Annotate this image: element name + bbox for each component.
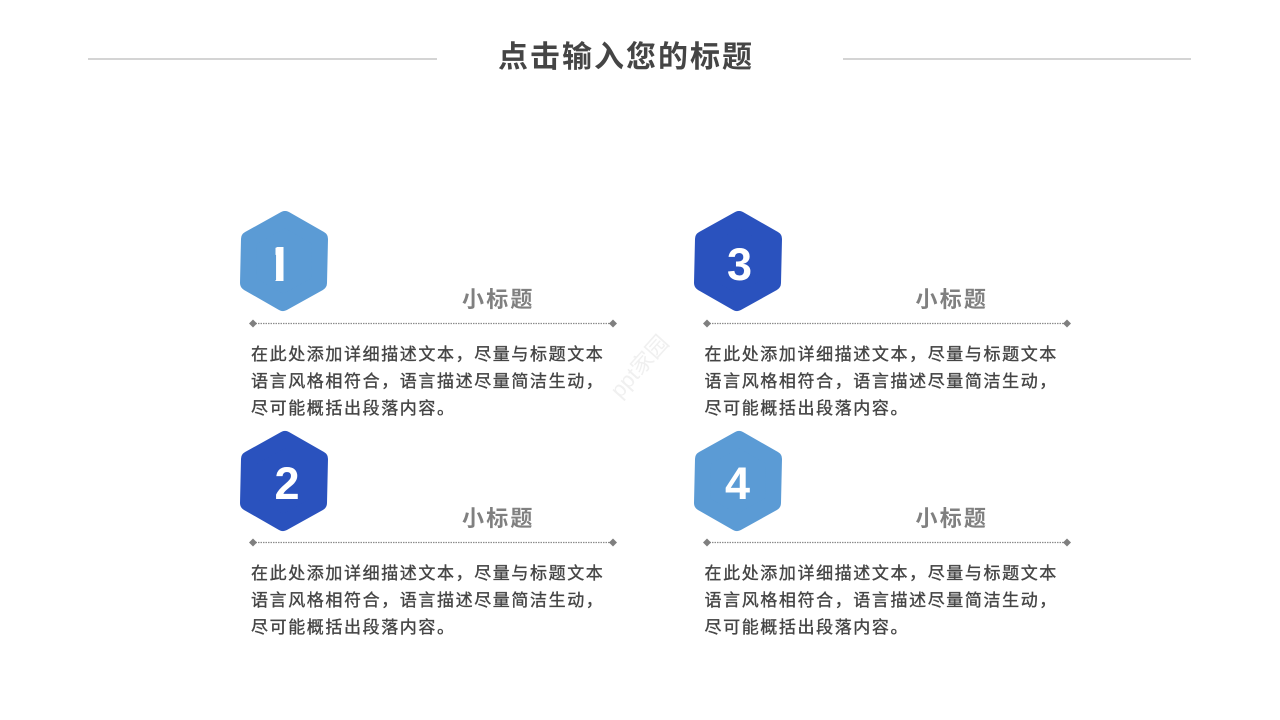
subheading: 小标题	[916, 506, 988, 530]
dotted separator	[249, 538, 617, 546]
text block: 尽可能概括出段落内容。	[251, 618, 456, 637]
text block	[704, 345, 1058, 418]
text block: 语言风格相符合，语言描述尽量简洁生动，	[251, 372, 604, 391]
text block: 在此处添加详细描述文本，尽量与标题文本	[251, 345, 604, 364]
text block	[251, 345, 604, 418]
text block: 尽可能概括出段落内容。	[251, 399, 456, 418]
icon: hexagon 1	[240, 211, 328, 312]
text block: 在此处添加详细描述文本，尽量与标题文本	[704, 564, 1058, 583]
text block: 语言风格相符合，语言描述尽量简洁生动，	[704, 591, 1058, 610]
subheading: 小标题	[916, 286, 988, 312]
text block	[704, 564, 1058, 637]
panel: item 4	[694, 430, 1071, 637]
title rule right	[843, 58, 1191, 60]
icon: hexagon 2: 2	[274, 458, 300, 509]
icon: hexagon 3	[694, 211, 782, 312]
text block: 语言风格相符合，语言描述尽量简洁生动，	[251, 591, 604, 610]
title: 点击输入您的标题	[498, 41, 754, 74]
dotted separator	[703, 538, 1071, 546]
title rule left	[88, 58, 437, 60]
icon: hexagon 3: 3	[726, 239, 752, 290]
text block	[251, 564, 604, 637]
panel: item 2	[240, 430, 617, 637]
text block: 尽可能概括出段落内容。	[704, 399, 909, 418]
icon: hexagon 1: 1	[263, 224, 295, 303]
icon: hexagon 4: 4	[724, 458, 750, 509]
subheading: 小标题	[462, 286, 535, 312]
icon: hexagon 2	[240, 430, 328, 532]
icon: hexagon 4	[694, 430, 782, 532]
subheading: 小标题	[462, 506, 535, 530]
text block: 尽可能概括出段落内容。	[704, 618, 909, 637]
watermark: ppt家园	[605, 330, 674, 402]
dotted separator	[703, 320, 1071, 328]
dotted separator	[249, 320, 617, 328]
panel: item 3	[694, 211, 1071, 418]
text block: 语言风格相符合，语言描述尽量简洁生动，	[704, 372, 1058, 391]
text block: 在此处添加详细描述文本，尽量与标题文本	[704, 345, 1058, 364]
text block: 在此处添加详细描述文本，尽量与标题文本	[251, 564, 604, 583]
panel: item 1	[240, 211, 617, 418]
